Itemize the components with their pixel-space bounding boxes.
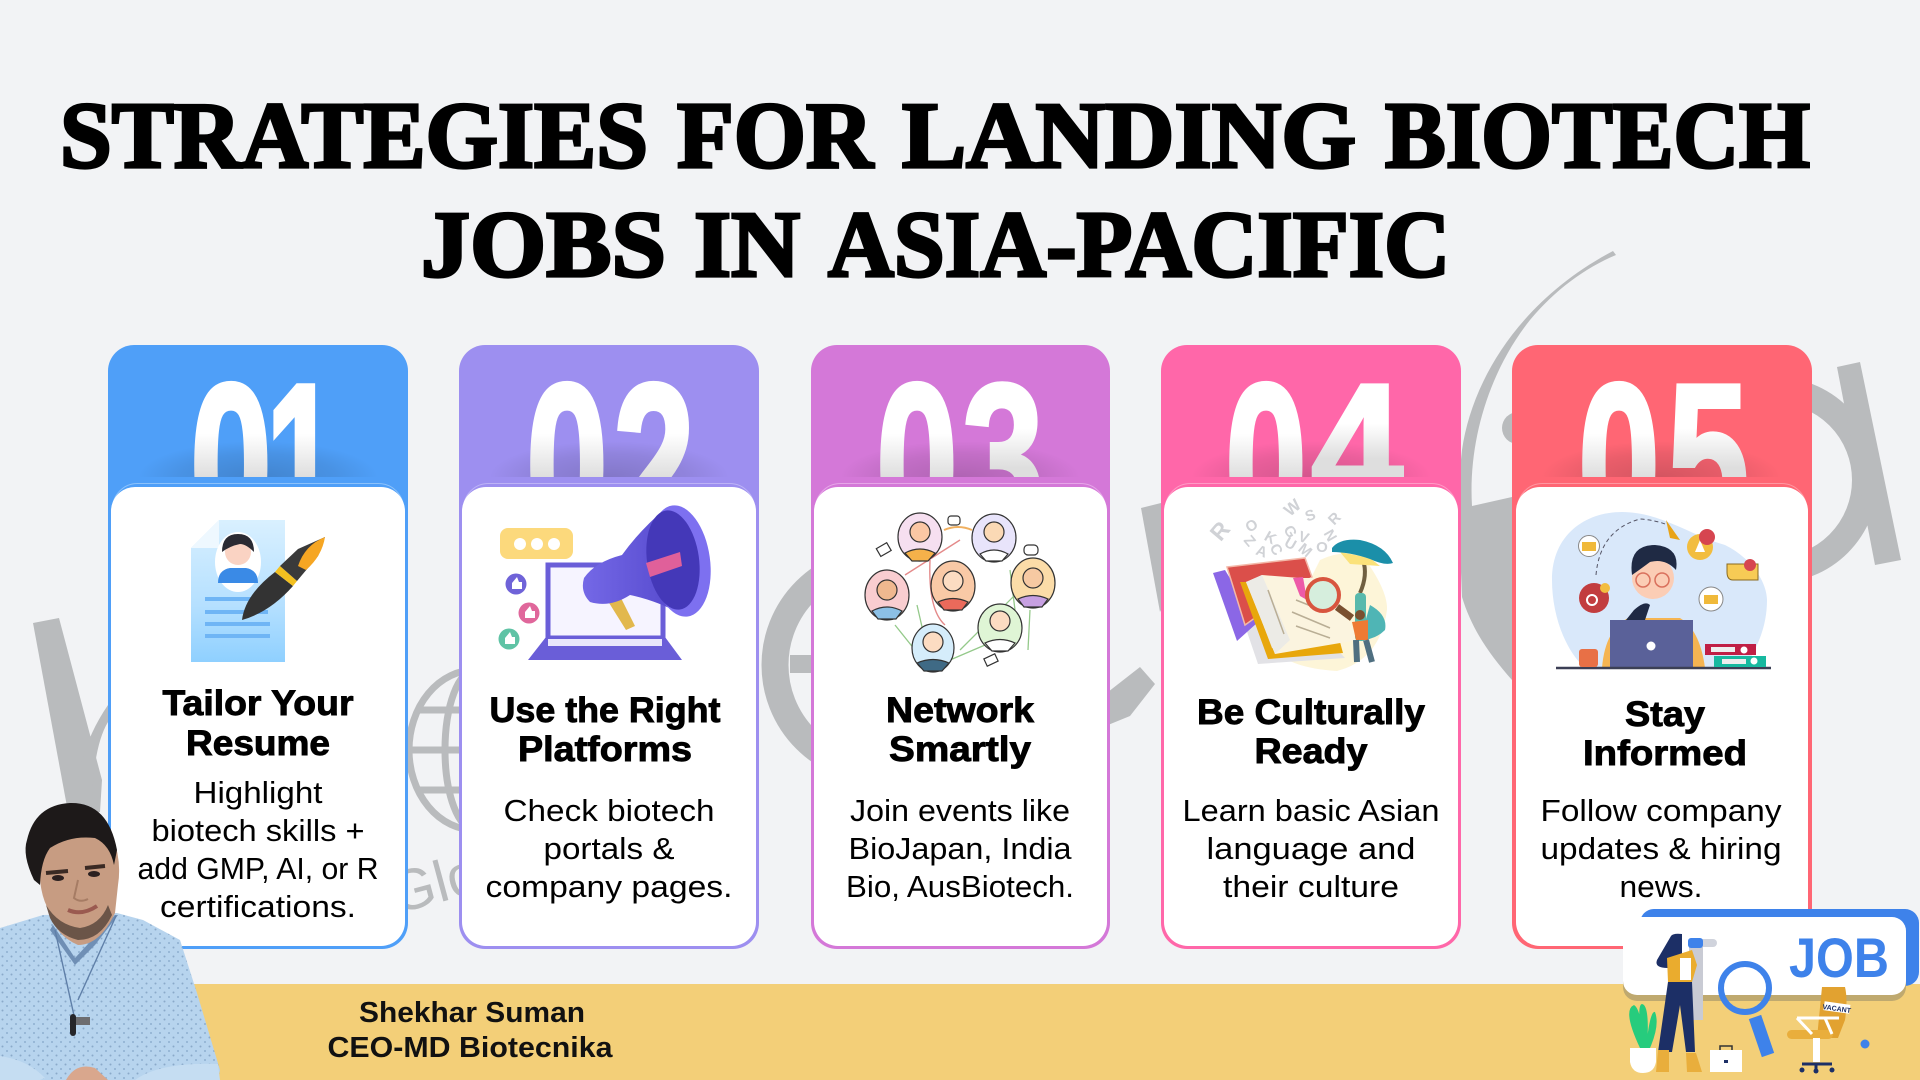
body text: their culture <box>1223 869 1399 904</box>
heading: Tailor Your <box>162 684 354 723</box>
watermark logo: Global <box>383 820 561 927</box>
title: ASIA-PACIFIC <box>828 193 1450 297</box>
presenter name and title: Shekhar Suman <box>359 997 585 1029</box>
letters cloud: A <box>1254 542 1270 562</box>
heading: Resume <box>186 724 330 763</box>
title <box>60 84 1810 297</box>
title: JOBS <box>421 193 666 297</box>
heading <box>162 684 354 763</box>
letters cloud: Z <box>1240 532 1259 550</box>
heading: Use the Right <box>490 691 721 730</box>
card 1: tailor your resume <box>108 336 408 949</box>
body text: Follow company <box>1540 793 1782 828</box>
presenter name and title <box>328 997 613 1064</box>
card 5: stay informed: 0 <box>1578 336 1660 593</box>
letters cloud: C <box>1266 541 1286 559</box>
woman with binoculars <box>1656 934 1717 1072</box>
letters cloud: W <box>1280 495 1305 520</box>
icon: resume and pen <box>191 520 325 662</box>
card 4: be culturally ready: 0 <box>1225 336 1307 593</box>
letters cloud: G <box>1280 522 1300 541</box>
body text <box>138 775 378 924</box>
heading: Platforms <box>518 730 692 769</box>
title: BIOTECH <box>1385 84 1810 188</box>
heading <box>1583 695 1747 773</box>
letters cloud: S <box>1303 506 1318 525</box>
letters cloud: R <box>1205 516 1235 546</box>
heading: Informed <box>1583 734 1747 773</box>
heading <box>1197 693 1426 771</box>
body text: company pages. <box>486 869 732 904</box>
body text: Learn basic Asian <box>1182 793 1440 828</box>
letters cloud: O <box>1242 516 1261 536</box>
card 4: be culturally ready <box>1161 336 1461 949</box>
body text: updates & hiring <box>1540 831 1782 866</box>
body text: add GMP, AI, or R <box>138 851 378 886</box>
letters cloud: O <box>1316 539 1328 556</box>
card 2: use the right platforms: 0 <box>526 336 608 593</box>
card 4: be culturally ready: 4 <box>1311 347 1403 552</box>
icon: open book, lamp and reader <box>1205 495 1393 671</box>
title: LANDING <box>902 84 1356 188</box>
plant <box>1629 1004 1657 1073</box>
body text <box>1540 793 1782 904</box>
title: IN <box>694 193 800 297</box>
heading: Smartly <box>889 730 1032 769</box>
letters cloud <box>1205 495 1345 562</box>
icon: people network <box>865 513 1055 672</box>
heading: Stay <box>1625 695 1706 734</box>
watermark globe <box>409 670 541 830</box>
card 2: use the right platforms: 2 <box>613 336 695 593</box>
body text: biotech skills + <box>152 813 364 848</box>
magnifying glass <box>1721 964 1769 1055</box>
presenter name and title: CEO-MD Biotecnika <box>328 1032 613 1064</box>
body text: Bio, AusBiotech. <box>846 869 1074 904</box>
card 5: stay informed: 5 <box>1667 341 1749 573</box>
heading <box>886 691 1035 769</box>
title: FOR <box>677 84 874 188</box>
body text: Highlight <box>194 775 323 810</box>
body text: language and <box>1206 831 1416 866</box>
letters cloud: N <box>1320 527 1340 545</box>
letters cloud: V <box>1296 528 1311 547</box>
letters cloud: U <box>1281 534 1299 554</box>
body text: Check biotech <box>504 793 714 828</box>
card 1: tailor your resume: 1 <box>266 337 338 593</box>
presenter photo <box>0 803 220 1080</box>
footer banner <box>0 984 1920 1080</box>
vacant chair <box>1787 987 1870 1074</box>
body text: news. <box>1620 869 1702 904</box>
body text: certifications. <box>160 889 356 924</box>
letters cloud: R <box>1325 509 1345 529</box>
heading: Network <box>886 691 1035 730</box>
vacant chair: VACANT <box>1822 1004 1852 1015</box>
heading <box>490 691 721 769</box>
title: STRATEGIES <box>60 84 648 188</box>
letters cloud: K <box>1261 528 1279 548</box>
card 3: network smartly <box>811 336 1110 949</box>
card 2: use the right platforms <box>459 336 759 949</box>
card 1: tailor your resume: 0 <box>190 336 272 593</box>
card 3: network smartly: 0 <box>876 336 958 593</box>
body text: portals & <box>544 831 675 866</box>
body text <box>486 793 732 904</box>
body text: Join events like <box>850 793 1070 828</box>
card 3: network smartly: 3 <box>962 341 1044 573</box>
label: JOB: JOB <box>1789 926 1889 989</box>
body text <box>846 793 1074 904</box>
watermark logo <box>33 251 1901 927</box>
icon: megaphone and laptop <box>498 501 718 660</box>
icon: woman with laptop and notifications <box>1552 512 1771 668</box>
job search illustration <box>1623 909 1919 1074</box>
body text: BioJapan, India <box>848 831 1072 866</box>
body text <box>1182 793 1440 904</box>
heading: Be Culturally <box>1197 693 1426 732</box>
card 5: stay informed <box>1512 336 1812 949</box>
letters cloud: M <box>1295 540 1315 561</box>
briefcase <box>1710 1046 1742 1072</box>
heading: Ready <box>1254 732 1368 771</box>
